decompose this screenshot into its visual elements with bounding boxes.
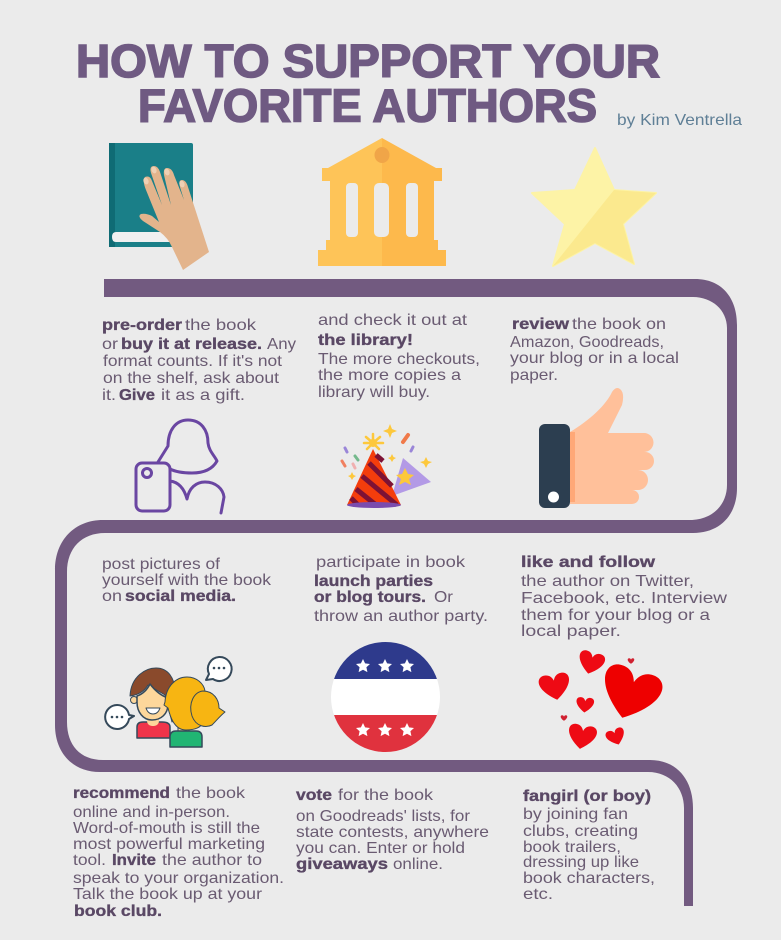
text: recommend: Invite bbox=[112, 852, 156, 869]
icon: book with hand bbox=[109, 143, 209, 270]
text: review: Amazon, Goodreads, bbox=[510, 334, 664, 351]
text: pre-order: it. bbox=[102, 387, 116, 404]
text: social media: yourself with the book bbox=[102, 572, 272, 589]
text: launch parties bbox=[314, 554, 488, 625]
icon: star bbox=[532, 148, 656, 266]
text: like and follow: Facebook, etc. Interview bbox=[521, 590, 728, 607]
title bbox=[76, 35, 660, 132]
speech bubble left bbox=[105, 705, 134, 729]
text: launch parties: launch parties bbox=[314, 573, 433, 590]
text: pre-order: it as a gift. bbox=[161, 387, 245, 404]
text: library: The more checkouts, bbox=[318, 351, 480, 368]
text: vote: state contests, anywhere bbox=[296, 824, 489, 841]
text: recommend: the book bbox=[176, 785, 246, 802]
text: recommend: book club. bbox=[74, 903, 162, 920]
text: social media: on bbox=[102, 588, 122, 605]
text: fangirl: book characters, bbox=[523, 870, 655, 887]
text: pre-order: on the shelf, ask about bbox=[103, 370, 280, 387]
text: library bbox=[318, 312, 480, 401]
text: like and follow: the author on Twitter, bbox=[521, 573, 694, 590]
text: fangirl bbox=[523, 788, 655, 903]
text: like and follow: them for your blog or a bbox=[521, 607, 710, 624]
icon: patriotic vote badge bbox=[330, 640, 442, 753]
text: pre-order: Any bbox=[267, 336, 296, 353]
text: pre-order bbox=[102, 317, 296, 404]
icon: thumbs up bbox=[539, 388, 654, 508]
text: review bbox=[510, 316, 679, 384]
text: vote: giveaways bbox=[296, 856, 388, 873]
text: recommend: Word-of-mouth is still the bbox=[73, 820, 260, 837]
text: fangirl: fangirl (or boy) bbox=[523, 788, 651, 805]
text: launch parties: or blog tours. bbox=[314, 589, 426, 606]
text: review: the book on bbox=[572, 316, 666, 333]
winding path bbox=[55, 279, 737, 906]
text: pre-order: buy it at release. bbox=[121, 336, 262, 353]
text: vote: for the book bbox=[338, 787, 434, 804]
text: like and follow: like and follow bbox=[521, 554, 656, 571]
icon: hearts bbox=[538, 649, 666, 751]
text: review: review bbox=[512, 316, 570, 333]
text: recommend: tool. bbox=[73, 852, 106, 869]
text: social media bbox=[102, 556, 272, 605]
text: recommend: recommend bbox=[73, 785, 170, 802]
text: pre-order: the book bbox=[185, 317, 257, 334]
text: recommend: speak to your organization. bbox=[73, 870, 284, 887]
text: library: the more copies a bbox=[318, 367, 461, 384]
text: like and follow bbox=[521, 554, 728, 640]
text: like and follow: local paper. bbox=[521, 623, 621, 640]
text: social media: social media. bbox=[125, 588, 236, 605]
text: recommend: Talk the book up at your bbox=[73, 886, 263, 903]
title: HOW TO SUPPORT YOUR bbox=[76, 35, 660, 87]
icon: library building bbox=[318, 138, 446, 266]
text: fangirl: etc. bbox=[523, 886, 553, 903]
text: launch parties: participate in book bbox=[316, 554, 466, 571]
text: fangirl: book trailers, bbox=[523, 839, 621, 856]
text: vote bbox=[296, 787, 489, 873]
text: review: your blog or in a local bbox=[510, 350, 679, 367]
text: recommend: most powerful marketing bbox=[73, 836, 265, 853]
text: fangirl: by joining fan bbox=[523, 806, 628, 823]
text: review: paper. bbox=[510, 367, 558, 384]
text: recommend: the author to bbox=[162, 852, 262, 869]
text: vote: you can. Enter or hold bbox=[296, 840, 465, 857]
text: recommend: online and in-person. bbox=[73, 804, 230, 821]
text: recommend bbox=[73, 785, 284, 920]
byline: by Kim Ventrella bbox=[617, 112, 742, 129]
icon: two people talking bbox=[105, 657, 232, 747]
text: vote: vote bbox=[296, 787, 332, 804]
text: launch parties: throw an author party. bbox=[314, 608, 488, 625]
text: vote: on Goodreads' lists, for bbox=[296, 808, 471, 825]
text: pre-order: or bbox=[102, 336, 119, 353]
text: fangirl: clubs, creating bbox=[523, 823, 638, 840]
text: pre-order: pre-order bbox=[102, 317, 182, 334]
icon: person with phone bbox=[136, 420, 224, 513]
text: library: library will buy. bbox=[318, 384, 430, 401]
icon: party hat bbox=[342, 424, 432, 508]
text: fangirl: dressing up like bbox=[523, 854, 639, 871]
text: social media: post pictures of bbox=[102, 556, 221, 573]
title: FAVORITE AUTHORS bbox=[138, 80, 597, 132]
text: vote: online. bbox=[393, 856, 443, 873]
text: launch parties: Or bbox=[434, 589, 454, 606]
text: pre-order: Give bbox=[119, 387, 155, 404]
text: pre-order: format counts. If it's not bbox=[103, 353, 283, 370]
text: library: the library! bbox=[318, 332, 413, 349]
text: library: and check it out at bbox=[318, 312, 468, 329]
